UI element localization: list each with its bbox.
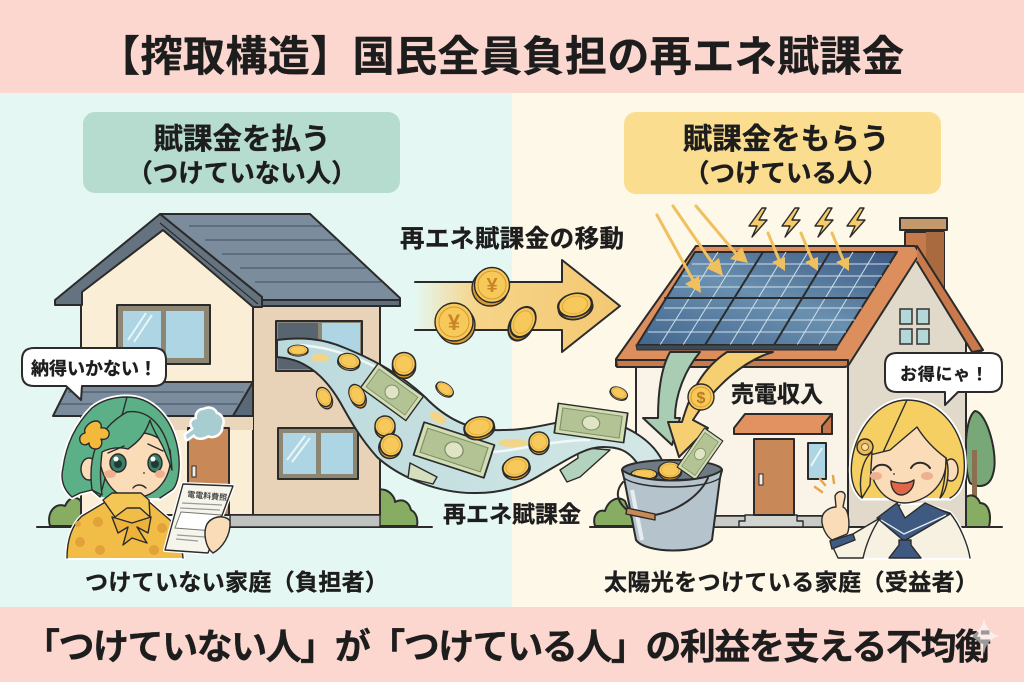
yellow arrow to bucket <box>668 352 773 457</box>
lightning bolts <box>749 208 865 237</box>
dollar coin: $ <box>697 390 706 407</box>
caption: non-owner: つけていない家庭（負担者） <box>85 569 388 595</box>
title band: 【搾取構造】国民全員負担の再エネ賦課金 <box>98 33 904 80</box>
label: selling income: 売電収入 <box>731 381 823 407</box>
attic window <box>900 309 929 344</box>
heading: pay side: 賦課金を払う <box>153 123 331 156</box>
porch roof <box>53 382 253 416</box>
gable wall <box>848 256 966 527</box>
front wall <box>636 366 848 516</box>
thumb up hand <box>822 492 849 540</box>
face <box>870 427 946 503</box>
green arrow head behind stream <box>560 447 610 482</box>
cheeks and mouth <box>104 470 165 488</box>
ground line left <box>37 526 432 528</box>
bushes left <box>49 489 417 526</box>
speech bubble right: お得にゃ！ <box>900 365 988 384</box>
bucket <box>618 428 723 550</box>
coins in stream <box>288 345 308 356</box>
speech bubble left <box>22 348 166 400</box>
heading: pay side <box>83 112 400 193</box>
porch shadow <box>160 416 253 430</box>
character: worried girl <box>22 348 233 558</box>
foundation <box>230 515 380 527</box>
cheeks <box>870 472 933 480</box>
bottom band: 「つけていない人」が「つけている人」の利益を支える不均衡 <box>24 626 991 667</box>
speech bubble right <box>885 353 1002 405</box>
bush behind bucket <box>594 499 635 526</box>
tree <box>966 411 995 527</box>
heading: pay side: （つけていない人） <box>127 160 357 188</box>
stray bill <box>408 463 437 484</box>
face <box>99 432 171 498</box>
right house <box>590 206 1002 527</box>
door <box>188 428 229 515</box>
green arrow to bucket <box>643 352 700 445</box>
sparkle watermark <box>969 618 999 654</box>
speech bubble left: 納得いかない！ <box>31 359 157 379</box>
yen coin top: ¥ <box>486 275 498 297</box>
ear <box>944 459 958 481</box>
sun rays <box>657 206 849 293</box>
bills <box>361 363 423 421</box>
upper left window <box>117 305 210 364</box>
closed eyes <box>873 463 930 470</box>
label: transfer: 再エネ賦課金の移動 <box>400 225 624 253</box>
hair back <box>62 397 179 498</box>
main roof <box>160 214 400 306</box>
left house <box>37 214 432 527</box>
coin tilted <box>503 302 541 345</box>
bangs <box>91 412 172 495</box>
chimney <box>900 218 947 292</box>
yen coin top <box>472 268 510 306</box>
ground line right <box>590 526 1002 528</box>
uniform <box>863 505 970 558</box>
front wall <box>81 230 253 515</box>
foundation <box>636 516 848 527</box>
collar <box>877 503 950 541</box>
awning <box>734 414 832 434</box>
mouth <box>891 480 914 495</box>
eyes <box>108 444 163 472</box>
bottom band <box>0 607 1024 682</box>
label: levy: 再エネ賦課金 <box>443 501 581 527</box>
caption: owner: 太陽光をつけている家庭（受益者） <box>604 569 978 595</box>
door <box>754 439 794 515</box>
yen coin bottom <box>435 303 475 344</box>
flower <box>80 421 109 449</box>
sleeve and arm <box>830 518 880 558</box>
hand <box>205 517 230 553</box>
gable barge board <box>55 214 262 307</box>
heading: receive side: 賦課金をもらう <box>683 123 889 156</box>
money stream <box>277 339 665 493</box>
bill paper: 電電料費照 <box>187 489 228 502</box>
coin flat <box>556 290 595 323</box>
side wall <box>253 306 380 515</box>
blouse <box>67 501 183 558</box>
yen coin bottom: ¥ <box>448 310 461 335</box>
background: left side <box>0 93 512 607</box>
bill paper <box>165 484 233 553</box>
flower <box>857 439 873 455</box>
side window <box>808 443 826 479</box>
collar and bow <box>103 493 151 545</box>
solar panels <box>636 252 897 350</box>
tie <box>889 540 921 558</box>
sparkle lines <box>815 476 834 492</box>
title band <box>0 0 1024 93</box>
background: right side <box>512 93 1024 607</box>
transfer arrow <box>415 260 620 352</box>
upper right window <box>276 321 362 371</box>
ear <box>81 458 97 480</box>
hair <box>851 400 964 498</box>
heading: receive side <box>624 112 941 194</box>
heading: receive side: （つけている人） <box>684 160 888 188</box>
sigh puff <box>186 409 222 439</box>
roof <box>616 246 983 366</box>
lower window <box>278 428 358 479</box>
character: happy girl <box>815 353 1002 558</box>
